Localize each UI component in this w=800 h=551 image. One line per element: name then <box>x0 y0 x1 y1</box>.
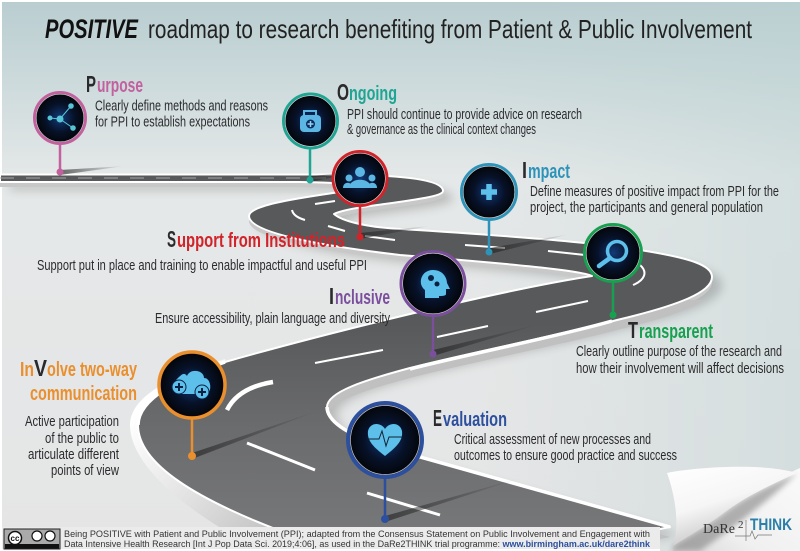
text: involve two-way communication <box>20 355 138 479</box>
text: evaluation: valuation <box>443 409 507 431</box>
text: transparent <box>576 317 784 377</box>
road <box>0 174 722 551</box>
title: POSITIVE <box>45 14 139 44</box>
text: support from institutions: Support put in place and training to enable impactful and useful PPI <box>37 257 367 274</box>
text: purpose: P <box>86 71 96 97</box>
logo: DaRe2THINK: THINK <box>750 516 792 534</box>
text: involve two-way communication: of the public to <box>45 430 119 447</box>
footer band <box>0 527 660 551</box>
footer citation <box>64 529 651 550</box>
text: involve two-way communication: articulate different <box>28 446 120 463</box>
text: involve two-way communication: In <box>20 359 34 381</box>
text: inclusive <box>155 283 390 327</box>
text: evaluation: E <box>433 405 442 431</box>
text: support from institutions: upport from Institutions <box>177 230 345 252</box>
text: involve two-way communication: V <box>34 355 48 381</box>
text: impact: I <box>522 157 527 183</box>
pin: evaluation <box>348 403 520 523</box>
text: involve two-way communication: communication <box>30 383 137 405</box>
pin: impact <box>462 164 570 256</box>
text: transparent: T <box>628 317 638 343</box>
text: impact: mpact <box>528 161 570 183</box>
text: support from institutions: S <box>167 226 176 252</box>
text: ongoing <box>337 79 582 138</box>
text: evaluation <box>433 405 677 464</box>
icon: medical bag <box>300 111 321 132</box>
text: evaluation: outcomes to ensure good practice and success <box>454 447 677 464</box>
icon: network <box>48 104 75 130</box>
text: support from institutions <box>37 226 367 274</box>
logo: DaRe2THINK: 2 <box>738 519 744 531</box>
text: ongoing: & governance as the clinical context changes <box>347 121 536 138</box>
pin: support <box>333 152 430 240</box>
icon: cloud with plus signs <box>172 371 210 399</box>
text: involve two-way communication: Active participation <box>25 413 119 430</box>
page curl <box>667 467 800 551</box>
icon: people <box>343 167 377 188</box>
icon: plus <box>481 184 497 200</box>
pin: ongoing <box>284 94 360 184</box>
text: purpose <box>86 71 268 130</box>
text: transparent: ransparent <box>639 321 713 343</box>
footer citation: Data Intensive Health Research [Int J Pop Data Sci. 2019;4:06], as used in the DaRe2THINK trial programme: www.birmingham.ac.uk/dare2think <box>64 539 651 550</box>
footer citation: Being POSITIVE with Patient and Public Involvement (PPI); adapted from the Consensus Statement on Public Involvement and Engagement with <box>64 529 650 540</box>
text: ongoing: ngoing <box>349 83 397 105</box>
pin: purpose <box>34 92 125 176</box>
pin: involve <box>159 352 320 460</box>
text: inclusive: nclusive <box>335 287 390 309</box>
text: purpose: urpose <box>97 75 143 97</box>
icon: head with gears <box>421 270 450 298</box>
text: evaluation: Critical assessment of new processes and <box>454 431 651 448</box>
logo: DaRe2THINK <box>703 516 792 541</box>
licence badge: cc <box>10 534 20 543</box>
text: inclusive: I <box>329 283 334 309</box>
text: purpose: Clearly define methods and reasons <box>95 98 268 114</box>
text: impact <box>522 157 779 216</box>
pin: transparent <box>584 224 642 318</box>
text: ongoing: PPI should continue to provide advice on research <box>347 106 582 123</box>
pin: inclusive <box>401 252 540 358</box>
text: purpose: for PPI to establish expectations <box>95 114 250 130</box>
text: involve two-way communication: points of view <box>51 462 119 479</box>
icon: heart with pulse <box>368 424 402 456</box>
text: involve two-way communication: olve two-way <box>47 359 138 381</box>
licence badge <box>4 529 60 549</box>
logo: DaRe2THINK: DaRe <box>703 522 735 537</box>
text: inclusive: Ensure accessibility, plain language and diversity <box>155 310 390 327</box>
icon: magnifier <box>599 242 626 266</box>
text: ongoing: O <box>337 79 349 105</box>
